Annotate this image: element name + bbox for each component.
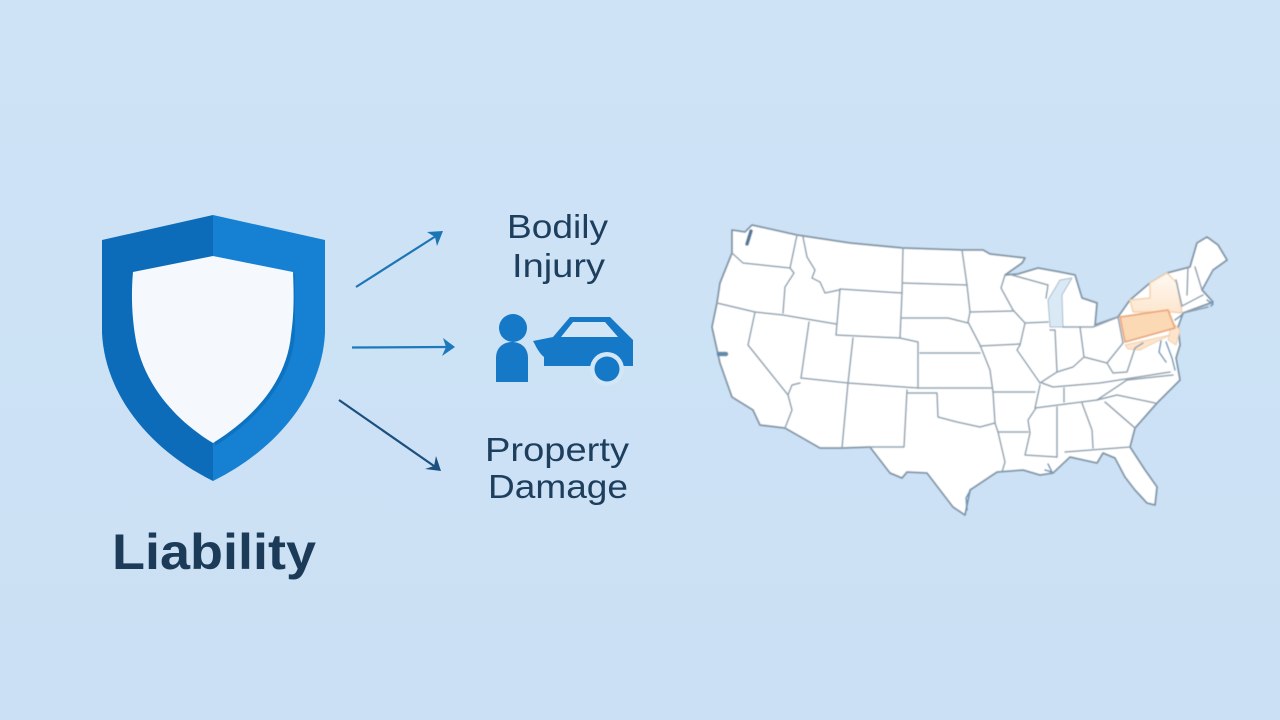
label: Property Damage: Damage bbox=[488, 468, 628, 505]
lake michigan bbox=[1048, 278, 1072, 327]
label: Bodily Injury: Injury bbox=[512, 247, 606, 284]
coastal water details bbox=[966, 300, 1213, 510]
label: Property Damage: Property bbox=[485, 431, 630, 468]
state borders bbox=[717, 235, 1208, 472]
highlight: New Jersey and Maryland strip bbox=[1125, 322, 1180, 350]
highlight: Pennsylvania bbox=[1120, 310, 1175, 342]
heading: Liability: Liability bbox=[112, 524, 316, 580]
map: United States bbox=[712, 225, 1227, 515]
arrow: to icon bbox=[352, 338, 455, 356]
puget sound bbox=[747, 231, 751, 244]
label: Property Damage bbox=[485, 431, 630, 505]
icon: person and car bbox=[496, 314, 633, 386]
san francisco bay bbox=[719, 352, 726, 356]
highlight: New York bbox=[1130, 273, 1182, 313]
label: Bodily Injury: Bodily bbox=[507, 208, 609, 245]
map outline bbox=[712, 225, 1227, 515]
arrow: to bodily injury bbox=[356, 231, 443, 287]
arrow: to property damage bbox=[339, 400, 441, 471]
icon: liability shield bbox=[102, 215, 325, 481]
label: Bodily Injury bbox=[507, 208, 609, 284]
